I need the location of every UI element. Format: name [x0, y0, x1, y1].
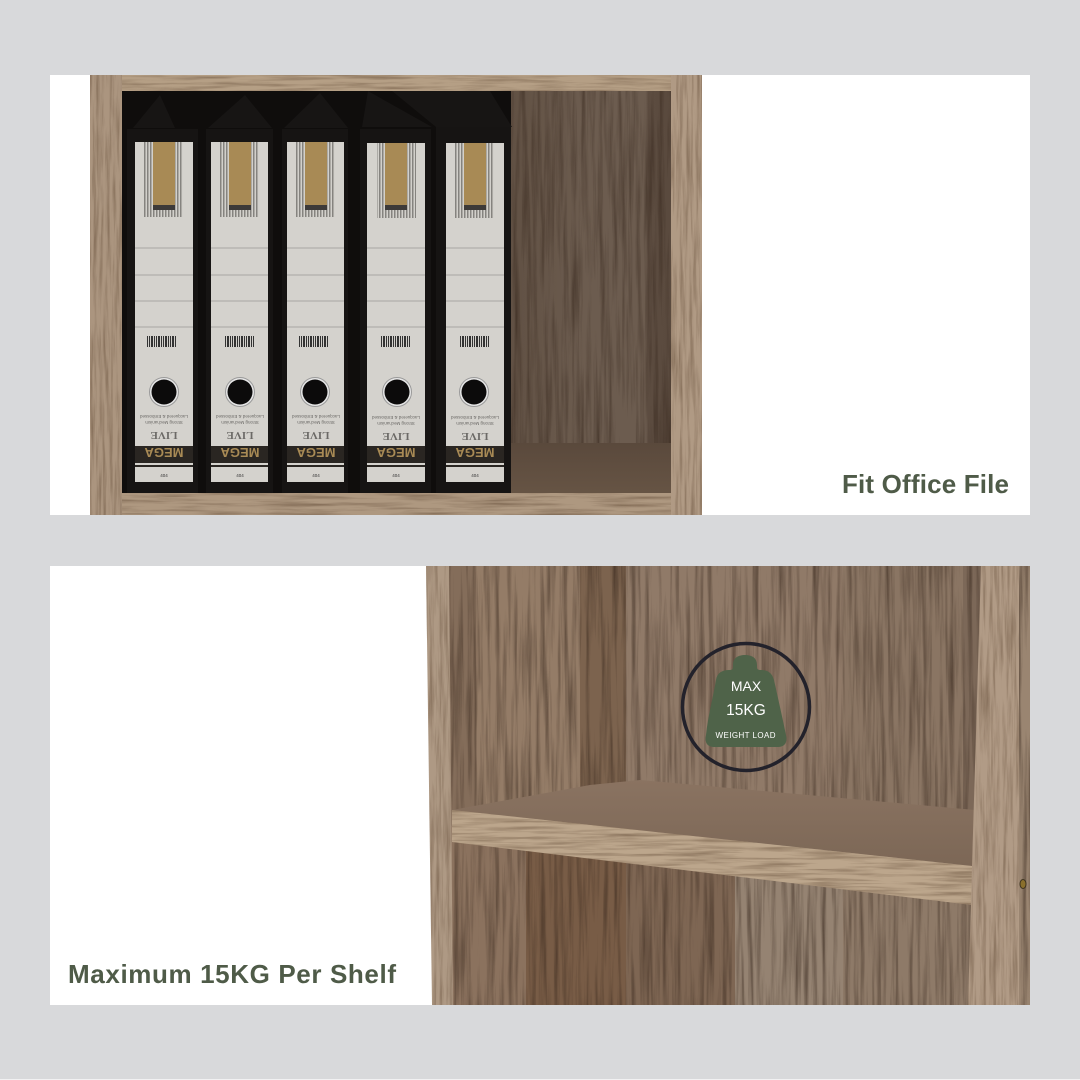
- lower back wall planks: [445, 826, 976, 1005]
- badge: max 15kg: 15KG: [726, 702, 766, 719]
- file 4: MEGA: [376, 445, 416, 460]
- file 5: Strong Mechanism: [456, 421, 494, 426]
- shelf top surface: [452, 780, 975, 866]
- file 2: Lacquered & Embossed: [215, 414, 264, 419]
- file 1: LIVE: [151, 429, 177, 441]
- file 1: Lacquered & Embossed: [139, 414, 188, 419]
- file 3: [282, 129, 348, 493]
- file 5: 404: [471, 473, 479, 478]
- file 5: Lacquered & Embossed: [450, 415, 499, 420]
- icon: weight: [705, 655, 787, 747]
- file flaps: [133, 91, 512, 128]
- file 2: LIVE: [227, 429, 253, 441]
- file 3: LIVE: [303, 429, 329, 441]
- screw: [1020, 880, 1026, 888]
- right post outer side: [1019, 566, 1030, 1005]
- file 4: [360, 129, 431, 493]
- dark interior behind files: [121, 91, 511, 493]
- file 1: MEGA: [144, 445, 184, 460]
- file 1: Strong Mechanism: [145, 420, 183, 425]
- file 1: 404: [160, 473, 168, 478]
- file 2: MEGA: [220, 445, 260, 460]
- badge: max 15kg: WEIGHT LOAD: [716, 731, 776, 740]
- caption: fit office file: Fit Office File: [842, 469, 1009, 499]
- office files: [127, 91, 512, 493]
- file 4: Strong Mechanism: [377, 421, 415, 426]
- file 5: MEGA: [455, 445, 494, 460]
- shelf unit floor: [500, 443, 671, 493]
- file 3: Lacquered & Embossed: [291, 414, 340, 419]
- panel: maximum load: [50, 566, 1030, 1005]
- badge: max 15kg: MAX: [731, 678, 762, 694]
- file 2: Strong Mechanism: [221, 420, 259, 425]
- file 4: Lacquered & Embossed: [371, 415, 420, 420]
- file 1: [127, 129, 198, 493]
- file 5: [436, 127, 511, 493]
- file 2: 404: [236, 473, 244, 478]
- file 3: MEGA: [296, 445, 336, 460]
- file 3: Strong Mechanism: [297, 420, 335, 425]
- right post: [968, 566, 1020, 1005]
- caption: maximum 15kg per shelf: Maximum 15KG Per Shelf: [68, 959, 396, 989]
- shelf front edge: [452, 810, 972, 905]
- file 4: LIVE: [383, 430, 409, 442]
- left post: [426, 566, 453, 1005]
- badge: max 15kg: [682, 644, 810, 770]
- shelf unit back wall: [500, 91, 671, 444]
- file 3: 404: [312, 473, 320, 478]
- upper back wall planks: [445, 566, 985, 826]
- shelf unit frame: [90, 75, 702, 515]
- file 5: LIVE: [462, 430, 488, 442]
- file 4: 404: [392, 473, 400, 478]
- panel: fit office file: [50, 75, 1030, 515]
- file 2: [206, 129, 273, 493]
